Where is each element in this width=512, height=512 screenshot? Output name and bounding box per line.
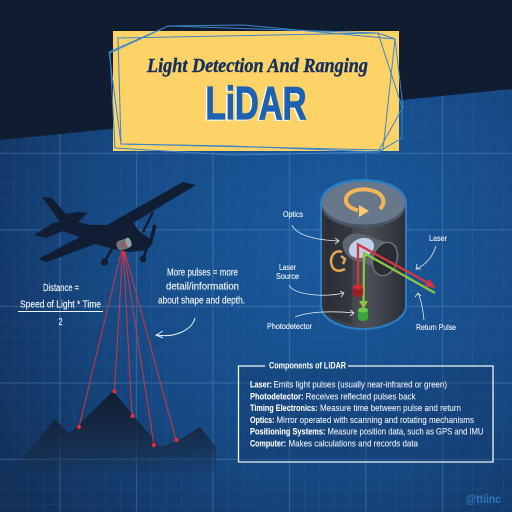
- mountain: [23, 391, 216, 478]
- blue outline: [320, 179, 407, 330]
- lidar cylinder diagram: [320, 179, 436, 330]
- components of lidar panel: [238, 360, 493, 462]
- subtitle: Light Detection And Ranging: [146, 55, 368, 77]
- diagram arrows: [289, 225, 436, 320]
- lidar sensor pod: [115, 237, 133, 251]
- distance formula: [18, 283, 103, 328]
- LiDAR heading: LiDAR: [204, 78, 305, 130]
- more pulses note: [158, 266, 245, 306]
- dark top band: [0, 0, 512, 140]
- component list: Mirror operated with scanning and rotating mechanisms: [276, 415, 474, 426]
- component list: Optics:: [250, 415, 274, 426]
- green photodetector: [358, 308, 368, 321]
- diagram labels: Laser: [279, 262, 296, 272]
- yellow panel: [113, 31, 399, 151]
- component list: Laser:: [250, 380, 272, 390]
- ground return points: [77, 390, 178, 447]
- laser pulses: [77, 245, 178, 447]
- diagram labels: Optics: [283, 209, 303, 219]
- airplane silhouette: [34, 182, 196, 266]
- scanner tube: [343, 233, 397, 274]
- diagram labels: Photodetector: [267, 321, 312, 331]
- blue wire frames: [109, 25, 403, 155]
- component list: Photodetector:: [250, 392, 304, 402]
- more pulses note: about shape and depth.: [158, 294, 245, 306]
- more pulses note: detail/information: [166, 280, 239, 292]
- component list: Receives reflected pulses back: [306, 392, 416, 402]
- rotation arrow on lid: [346, 189, 383, 217]
- arrow: more pulses note: [156, 318, 195, 338]
- lid: [322, 203, 405, 228]
- more pulses note: More pulses = more: [167, 266, 238, 278]
- distance formula: 2: [58, 317, 63, 328]
- component list: Timing Electronics:: [250, 403, 318, 414]
- component list: [250, 380, 484, 450]
- red laser beam: [358, 244, 430, 287]
- component list: Makes calculations and records data: [288, 438, 419, 450]
- LiDAR heading: LiDAR: [206, 77, 306, 129]
- title banner: [109, 25, 403, 155]
- component list: Computer:: [250, 438, 286, 450]
- panel heading: Components of LiDAR: [269, 360, 346, 370]
- diagram labels: Laser: [429, 233, 447, 243]
- cylinder body: [322, 204, 405, 328]
- component list: Emits light pulses (usually near-infrared or green): [274, 380, 447, 390]
- red laser source: [353, 284, 363, 297]
- diagram labels: Return Pulse: [416, 322, 456, 332]
- mirror: [346, 234, 377, 262]
- diagram labels: Source: [276, 271, 299, 281]
- component list: Positioning Systems:: [250, 426, 326, 438]
- panel frame: [238, 366, 493, 462]
- small rotation arrow: [331, 251, 345, 271]
- component list: Measure time between pulse and return: [320, 403, 461, 414]
- green return beam: [364, 253, 435, 305]
- distance formula: Distance =: [43, 283, 79, 294]
- credit handle: @ttiinc: [466, 492, 501, 506]
- distance formula: Speed of Light * Time: [20, 300, 101, 310]
- diagram labels: [267, 209, 456, 332]
